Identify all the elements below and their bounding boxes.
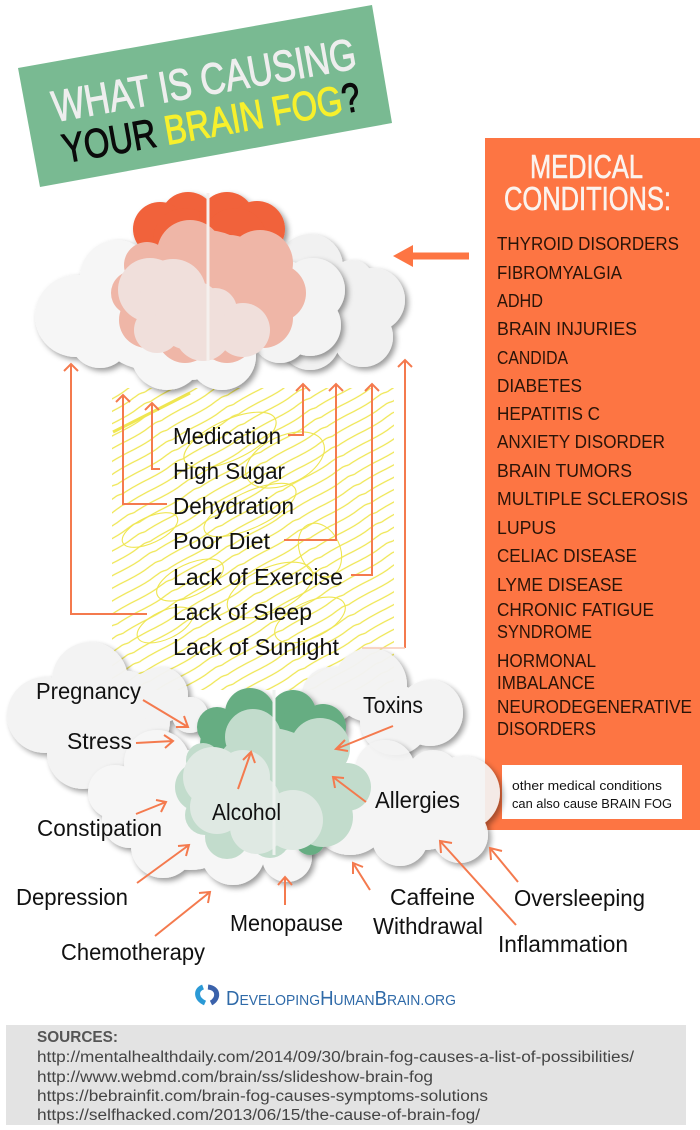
conditions list: LYME DISEASE bbox=[497, 575, 623, 595]
sources list: http://www.webmd.com/brain/ss/slideshow-brain-fog bbox=[37, 1069, 433, 1086]
cloud: front right bbox=[310, 740, 500, 866]
conditions list: ADHD bbox=[497, 291, 543, 311]
cloud: back right bbox=[302, 648, 463, 755]
cause labels: Inflammation bbox=[498, 931, 628, 957]
icon: logo ring bbox=[198, 987, 217, 1003]
conditions list: SYNDROME bbox=[497, 622, 592, 642]
conditions list: CANDIDA bbox=[497, 348, 568, 368]
factor list: Lack of Sleep bbox=[173, 599, 312, 625]
cause labels: Withdrawal bbox=[373, 913, 483, 939]
title line 2: YOUR BRAIN FOG? bbox=[59, 74, 364, 172]
brain: mid layer bbox=[111, 220, 306, 363]
cloud: right back bbox=[277, 234, 405, 370]
panel heading: MEDICAL bbox=[530, 148, 643, 185]
cause labels: Menopause bbox=[230, 910, 343, 936]
cause labels: Caffeine bbox=[390, 884, 475, 910]
title line 1: WHAT IS CAUSING bbox=[48, 30, 360, 132]
yellow scribble fog bbox=[112, 388, 394, 690]
factor list: High Sugar bbox=[173, 458, 285, 484]
cloud: front left bbox=[88, 730, 312, 885]
cloud: left bbox=[35, 240, 256, 390]
conditions list: DISORDERS bbox=[497, 719, 596, 739]
arrows: causes to lower brain bbox=[136, 700, 518, 936]
green brain: front layer bbox=[183, 747, 323, 854]
arrows: factors to top cloud bbox=[64, 360, 412, 648]
factor list: Lack of Exercise bbox=[173, 564, 343, 590]
factor list: Poor Diet bbox=[173, 528, 271, 554]
factor list: Lack of Sunlight bbox=[173, 634, 340, 660]
conditions list: THYROID DISORDERS bbox=[497, 234, 679, 254]
sources panel bbox=[6, 1025, 686, 1125]
factor list: Medication bbox=[173, 423, 281, 449]
conditions list bbox=[497, 234, 692, 739]
sources list bbox=[37, 1049, 635, 1124]
cloud: back left bbox=[7, 642, 208, 789]
conditions list: IMBALANCE bbox=[497, 673, 595, 693]
cause labels: Depression bbox=[16, 884, 128, 910]
cause labels: Chemotherapy bbox=[61, 939, 205, 965]
green brain: centre split bbox=[272, 690, 276, 855]
bottom brain in fog bbox=[7, 642, 500, 885]
factor list: Dehydration bbox=[173, 493, 294, 519]
callout: other conditions bbox=[502, 765, 682, 819]
conditions list: BRAIN INJURIES bbox=[497, 319, 637, 339]
top brain in fog bbox=[35, 192, 405, 390]
green brain: mid layer bbox=[175, 709, 371, 859]
factor list bbox=[173, 423, 343, 660]
conditions list: CHRONIC FATIGUE bbox=[497, 600, 654, 620]
cause labels: Toxins bbox=[363, 692, 423, 718]
conditions list: CELIAC DISEASE bbox=[497, 546, 637, 566]
sources list: http://mentalhealthdaily.com/2014/09/30/brain-fog-causes-a-list-of-possibilities/ bbox=[37, 1049, 635, 1066]
brain: centre split bbox=[206, 193, 210, 361]
conditions list: MULTIPLE SCLEROSIS bbox=[497, 489, 688, 509]
cause labels: Alcohol bbox=[212, 799, 281, 825]
brain: dark lobes bbox=[133, 192, 285, 272]
logo bbox=[198, 987, 456, 1010]
cloud: right front bbox=[235, 258, 345, 363]
cause labels: Constipation bbox=[37, 815, 162, 841]
title banner bbox=[18, 5, 392, 187]
cause labels bbox=[16, 678, 645, 965]
conditions list: BRAIN TUMORS bbox=[497, 461, 632, 481]
conditions list: ANXIETY DISORDER bbox=[497, 432, 665, 452]
cause labels: Oversleeping bbox=[514, 885, 645, 911]
conditions list: DIABETES bbox=[497, 376, 582, 396]
sources list: https://selfhacked.com/2013/06/15/the-cause-of-brain-fog/ bbox=[37, 1107, 481, 1124]
conditions list: NEURODEGENERATIVE bbox=[497, 697, 692, 717]
conditions list: FIBROMYALGIA bbox=[497, 263, 622, 283]
conditions list: HEPATITIS C bbox=[497, 404, 600, 424]
callout: other conditions: can also cause BRAIN FOG bbox=[512, 797, 672, 811]
panel: medical conditions bbox=[485, 138, 700, 830]
conditions list: LUPUS bbox=[497, 518, 556, 538]
sources heading: SOURCES: bbox=[37, 1029, 118, 1046]
sources list: https://bebrainfit.com/brain-fog-causes-symptoms-solutions bbox=[37, 1088, 488, 1105]
green brain: dark lobes bbox=[197, 688, 346, 855]
panel heading bbox=[504, 148, 671, 217]
callout: other conditions: other medical conditions bbox=[512, 779, 662, 793]
cause labels: Allergies bbox=[375, 787, 460, 813]
cause labels: Stress bbox=[67, 728, 132, 754]
arrow: conditions to brain bbox=[393, 245, 469, 267]
conditions list: HORMONAL bbox=[497, 651, 596, 671]
brain: front layer bbox=[118, 258, 270, 361]
cause labels: Pregnancy bbox=[36, 678, 141, 704]
logo text: DEVELOPINGHUMANBRAIN.ORG bbox=[226, 988, 456, 1010]
